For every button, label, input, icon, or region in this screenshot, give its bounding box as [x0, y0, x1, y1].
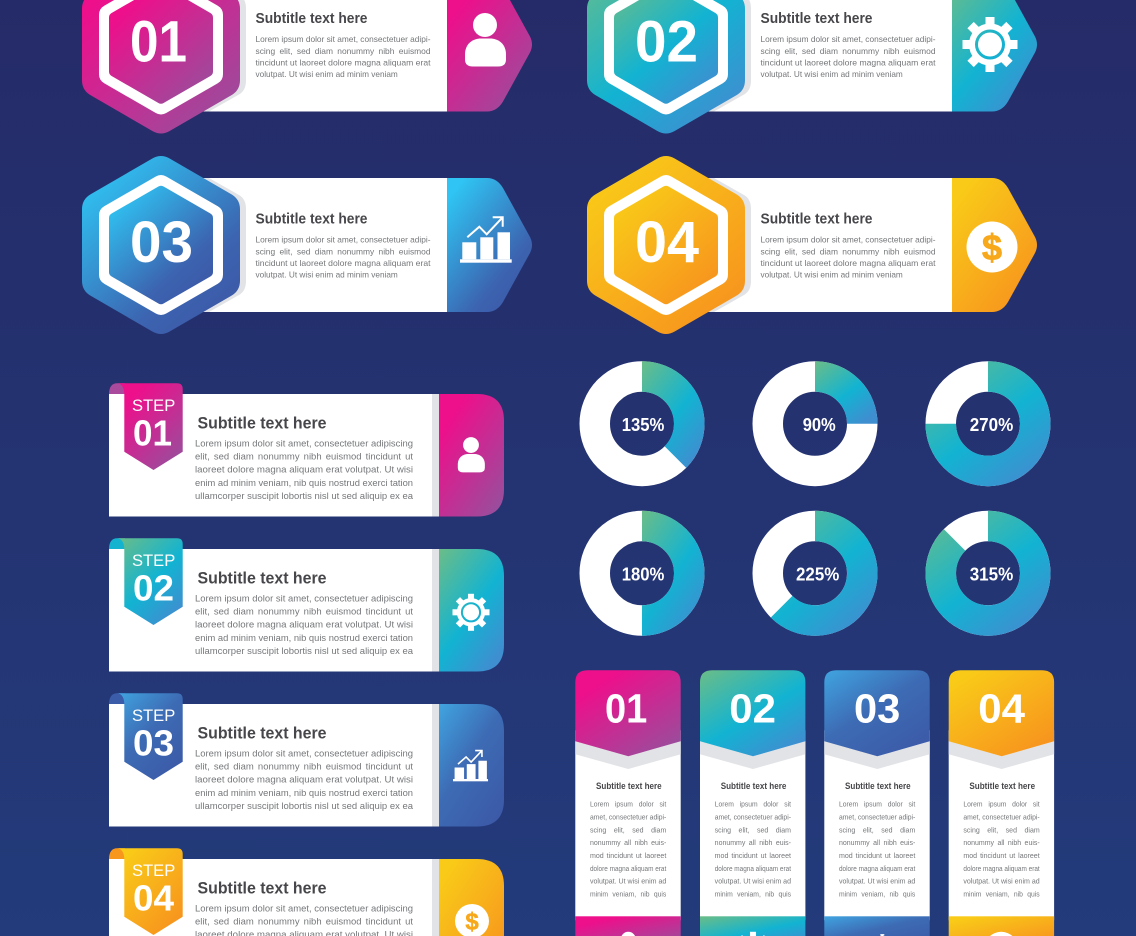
body text step 02: ullamcorper suscipit lobortis nisl ut sed aliquip ex ea [195, 646, 414, 657]
column body 01: volutpat. Ut wisi enim ad [590, 879, 666, 886]
tab with person icon [439, 394, 504, 516]
column body 01: minim veniam, nib quis [590, 891, 667, 898]
body text step 03: elit, sed diam nonummy nibh euismod tincidunt ut [195, 762, 413, 772]
panel: hexagon card 04 [587, 156, 1037, 334]
column body 02: amet, consectetuer adipi- [715, 814, 791, 821]
body text step 01: laoreet dolore magna aliquam erat volutpat. Ut wisi [195, 465, 413, 476]
body text 03: tincidunt ut laoreet dolore magna aliquam erat [256, 258, 431, 268]
column body 02: dolore magna aliquam erat [715, 866, 791, 873]
column body 01: Lorem ipsum dolor sit [590, 802, 666, 809]
body text step 04: elit, sed diam nonummy nibh euismod tincidunt ut [195, 916, 413, 928]
column body 04: amet, consectetuer adipi- [963, 814, 1040, 821]
column header 02 [700, 670, 805, 756]
body text step 01: ullamcorper suscipit lobortis nisl ut sed aliquip ex ea [195, 491, 414, 502]
column body 01 [590, 802, 667, 898]
body text 01 [256, 34, 431, 79]
body text 04: tincidunt ut laoreet dolore magna aliquam erat [760, 258, 936, 268]
step ribbon 04: STEP [132, 861, 175, 880]
donut chart 180% [595, 511, 704, 636]
body text 03: Lorem ipsum dolor sit amet, consectetuer adipi- [256, 235, 431, 245]
donut chart 135% [595, 361, 705, 471]
arrow tab with dollar icon [952, 178, 1037, 312]
tab with gear icon [439, 549, 504, 672]
tab with dollar icon [439, 859, 504, 936]
panel: column card 04 [949, 670, 1054, 936]
column body 02 [715, 802, 792, 898]
body text 02: tincidunt ut laoreet dolore magna aliquam erat [760, 58, 936, 68]
arrow tab with chart icon [447, 178, 532, 312]
body text 02: scing elit, sed diam nonummy nibh euismod [760, 46, 936, 56]
column footer 03 with chart icon [824, 916, 930, 936]
body text 02: volutpat. Ut wisi enim ad minim veniam [760, 69, 903, 79]
column body 02: scing elit, sed diam [715, 827, 791, 834]
subtitle 03: Subtitle text here [256, 210, 368, 228]
donut chart 315% [925, 511, 1050, 636]
body text 04: volutpat. Ut wisi enim ad minim veniam [760, 270, 903, 280]
body text step 03 [195, 748, 414, 812]
body text step 03: ullamcorper suscipit lobortis nisl ut sed aliquip ex ea [195, 801, 414, 812]
step ribbon 01: 01 [133, 413, 172, 454]
body text 03: scing elit, sed diam nonummy nibh euismod [256, 246, 431, 256]
body text step 01: enim ad minim veniam, nib quis nostrud exerci tation [195, 478, 413, 489]
column body 03: mod tincidunt ut laoreet [839, 853, 915, 860]
donut chart 315%: 315% [970, 565, 1013, 585]
body text step 03: Lorem ipsum dolor sit amet, consectetuer adipiscing [195, 748, 413, 759]
column body 01: dolore magna aliquam erat [590, 866, 666, 873]
column body 03: amet, consectetuer adipi- [839, 814, 915, 821]
column body 03: volutpat. Ut wisi enim ad [839, 879, 915, 886]
panel: hexagon card 01 [82, 0, 532, 134]
subtitle 02: Subtitle text here [760, 10, 872, 27]
arrow tab with person icon [447, 0, 532, 112]
donut chart 135%: 135% [622, 415, 664, 435]
body text step 04 [195, 903, 413, 936]
column subtitle 03: Subtitle text here [845, 781, 911, 791]
column body 03: dolore magna aliquam erat [839, 866, 915, 873]
column subtitle 01: Subtitle text here [596, 781, 662, 791]
body text 03 [256, 235, 431, 280]
panel: step card 03 [109, 693, 504, 826]
column subtitle 04: Subtitle text here [969, 781, 1035, 791]
step ribbon 04: 04 [133, 878, 174, 919]
subtitle step 02: Subtitle text here [198, 569, 326, 588]
body text step 01 [195, 438, 414, 502]
column body 02: nonummy all nibh euis- [715, 840, 791, 847]
panel: column card 01 [575, 670, 681, 936]
column header 03: 03 [854, 685, 900, 731]
column header 03 [824, 670, 930, 756]
body text 01: tincidunt ut laoreet dolore magna aliquam erat [256, 58, 431, 68]
column body 04: scing elit, sed diam [963, 827, 1040, 834]
body text step 02: enim ad minim veniam, nib quis nostrud exerci tation [195, 633, 413, 644]
subtitle step 04: Subtitle text here [198, 879, 326, 898]
step ribbon 03: STEP [132, 706, 175, 725]
hexagon badge 03 [82, 156, 240, 334]
hexagon badge 04 [587, 156, 745, 334]
panel: step card 04 [109, 848, 504, 936]
body text step 01: Lorem ipsum dolor sit amet, consectetuer adipiscing [195, 438, 413, 449]
body text step 02: Lorem ipsum dolor sit amet, consectetuer adipiscing [195, 593, 413, 604]
column body 02: mod tincidunt ut laoreet [715, 853, 791, 860]
hexagon badge 01 [82, 0, 240, 134]
column header 04 [949, 670, 1054, 756]
column body 03: Lorem ipsum dolor sit [839, 802, 915, 809]
body text step 03: laoreet dolore magna aliquam erat volutpat. Ut wisi [195, 775, 413, 786]
hexagon badge 02: 02 [635, 10, 698, 74]
subtitle 04: Subtitle text here [760, 210, 872, 228]
body text step 02 [195, 593, 414, 657]
column body 04: volutpat. Ut wisi enim ad [963, 879, 1040, 886]
body text 01: scing elit, sed diam nonummy nibh euismod [256, 46, 431, 56]
step ribbon 02: STEP [132, 551, 175, 570]
column body 02: Lorem ipsum dolor sit [715, 802, 791, 809]
panel: step card 01 [109, 383, 504, 516]
subtitle step 01: Subtitle text here [198, 414, 326, 433]
step ribbon 02 [109, 538, 183, 625]
column header 01: 01 [605, 685, 647, 731]
column body 01: amet, consectetuer adipi- [590, 814, 666, 821]
arrow tab with dollar icon: $ [982, 227, 1002, 268]
column header 04: 04 [978, 685, 1025, 731]
subtitle step 03: Subtitle text here [198, 724, 326, 743]
column footer 02 with gear icon [700, 916, 805, 936]
step ribbon 01 [109, 383, 183, 470]
step ribbon 01: STEP [132, 396, 175, 415]
body text 03: volutpat. Ut wisi enim ad minim veniam [256, 270, 398, 280]
body text 04 [760, 235, 936, 280]
column body 03: scing elit, sed diam [839, 827, 916, 834]
donut chart 270% [926, 361, 1050, 486]
column body 01: scing elit, sed diam [590, 827, 667, 834]
column body 04: dolore magna aliquam erat [963, 866, 1040, 873]
panel: hexagon card 03 [82, 156, 532, 334]
column body 04: minim veniam, nib quis [963, 891, 1040, 898]
panel: column card 02 [700, 670, 805, 936]
body text step 02: laoreet dolore magna aliquam erat volutpat. Ut wisi [195, 620, 413, 631]
panel: hexagon card 02 [587, 0, 1037, 134]
step ribbon 03 [109, 693, 183, 780]
column subtitle 02: Subtitle text here [721, 781, 786, 791]
body text 04: Lorem ipsum dolor sit amet, consectetuer adipi- [760, 235, 936, 245]
donut chart 225%: 225% [796, 565, 839, 585]
column body 04 [963, 802, 1040, 898]
column body 03: nonummy all nibh euis- [839, 840, 915, 847]
donut chart 90% [768, 361, 878, 471]
body text 02 [760, 34, 936, 79]
column body 04: nonummy all nibh euis- [963, 840, 1040, 847]
donut chart 180%: 180% [622, 565, 664, 585]
column header 02: 02 [729, 685, 776, 731]
step ribbon 04 [109, 848, 183, 935]
body text step 01: elit, sed diam nonummy nibh euismod tincidunt ut [195, 452, 413, 462]
column footer 04 with dollar icon [949, 916, 1054, 936]
donut chart 90%: 90% [803, 415, 836, 435]
column footer 01 with person icon [575, 916, 681, 936]
tab with chart icon [439, 704, 504, 826]
body text step 02: elit, sed diam nonummy nibh euismod tincidunt ut [195, 606, 413, 618]
hexagon badge 02 [587, 0, 745, 134]
body text 01: volutpat. Ut wisi enim ad minim veniam [256, 69, 398, 79]
hexagon badge 03: 03 [130, 210, 193, 275]
step ribbon 02: 02 [133, 568, 174, 609]
panel: column card 03 [824, 670, 930, 936]
donut chart 270%: 270% [970, 415, 1013, 435]
tab with dollar icon: $ [465, 908, 479, 936]
hexagon badge 04: 04 [635, 210, 699, 275]
body text 02: Lorem ipsum dolor sit amet, consectetuer adipi- [760, 34, 936, 44]
column body 01: mod tincidunt ut laoreet [590, 853, 666, 860]
step ribbon 03: 03 [133, 723, 174, 764]
panel: step card 02 [109, 538, 504, 672]
column body 03 [839, 802, 916, 898]
arrow tab with gear icon [952, 0, 1037, 112]
column body 01: nonummy all nibh euis- [590, 840, 666, 847]
body text 04: scing elit, sed diam nonummy nibh euismod [760, 246, 936, 256]
column body 04: mod tincidunt ut laoreet [963, 853, 1040, 860]
hexagon badge 01: 01 [130, 10, 187, 74]
column body 03: minim veniam, nib quis [839, 891, 916, 898]
column body 02: volutpat. Ut wisi enim ad [715, 879, 791, 886]
body text step 04: Lorem ipsum dolor sit amet, consectetuer adipiscing [195, 903, 413, 914]
column header 01 [575, 670, 681, 756]
column body 04: Lorem ipsum dolor sit [963, 802, 1040, 809]
donut chart 225% [768, 511, 877, 636]
body text 01: Lorem ipsum dolor sit amet, consectetuer adipi- [256, 34, 431, 44]
subtitle 01: Subtitle text here [256, 10, 368, 27]
body text step 03: enim ad minim veniam, nib quis nostrud exerci tation [195, 788, 413, 799]
column body 02: minim veniam, nib quis [715, 891, 792, 898]
